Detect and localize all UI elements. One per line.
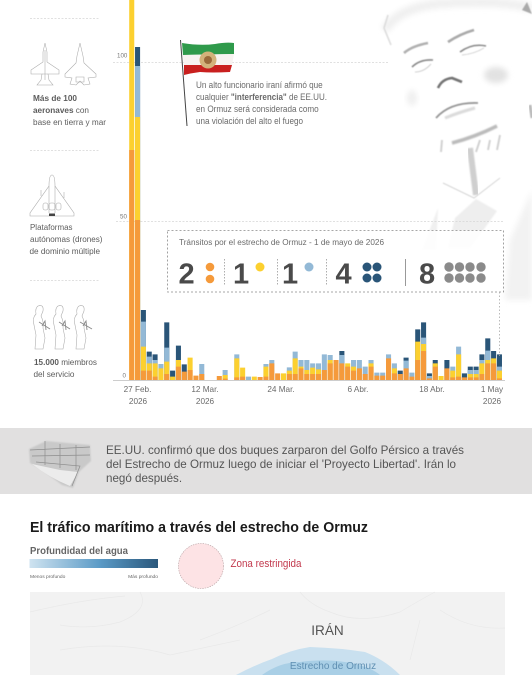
legend: water depth: Profundidad del agua [30, 546, 129, 557]
x axis labels: 24 Mar. [267, 385, 295, 394]
text: aircraft: base en tierra y mar [33, 117, 106, 127]
panel: transits on 1 May [168, 230, 504, 356]
text: aircraft: Más de 100 [33, 93, 77, 103]
x axis labels: 12 Mar. [191, 385, 219, 394]
count: oil 2: 2 [178, 258, 195, 290]
panel title: Tránsitos por el estrecho de Ormuz - 1 de mayo de 2026 [179, 237, 384, 247]
x axis labels: 6 Abr. [348, 385, 368, 394]
legend: restricted zone [178, 544, 302, 588]
legend: water depth: Más profundo [128, 574, 158, 580]
count: 1 yellow [233, 258, 264, 290]
legend: water depth [30, 546, 158, 580]
note text: EE.UU. confirmó que dos buques zarparon del Golfo Pérsico a través [106, 444, 464, 457]
x axis labels [124, 385, 504, 406]
y axis labels: 0 [122, 372, 126, 380]
icon: drone [30, 175, 74, 216]
icon: soldiers [33, 306, 92, 349]
count: total 8 [419, 258, 486, 290]
x axis labels: 2026 [129, 397, 148, 406]
x axis labels: 18 Abr. [419, 385, 445, 394]
count: 1 light blue: 1 [282, 258, 298, 290]
label: country: IRÁN [311, 623, 344, 638]
text: aircraft [33, 93, 106, 127]
legend: water depth: Menos profundo [30, 574, 66, 580]
portrait: sketch of Trump [384, 2, 532, 300]
text: aircraft: aeronaves con [33, 105, 89, 115]
text: service members [34, 357, 97, 379]
x axis labels: 2026 [196, 397, 215, 406]
y axis labels [117, 52, 128, 380]
note text [106, 444, 464, 485]
text: service members: 15.000 miembros [34, 357, 97, 367]
x axis labels: 2026 [483, 397, 502, 406]
text: Iranian official [196, 80, 327, 126]
panel: note band [0, 428, 532, 494]
text: drones: de dominio múltiple [30, 246, 100, 256]
count: 1 yellow: 1 [233, 258, 249, 290]
x axis labels: 1 May [481, 385, 504, 394]
text: Iranian official: una violación del alto el fuego [196, 116, 303, 126]
count: total 8: 8 [419, 258, 435, 290]
count: 4 dark blue [336, 258, 382, 290]
text: service members: del servicio [34, 369, 75, 379]
divider lines [30, 18, 504, 280]
stacked bars [129, 0, 502, 380]
text: Iranian official: Un alto funcionario iraní afirmó que [196, 80, 323, 90]
text: drones: Plataformas [30, 222, 72, 232]
text: Iranian official: en Ormuz será considerada como [196, 104, 319, 114]
y axis labels: 100 [117, 52, 128, 60]
count: 4 dark blue: 4 [336, 258, 352, 290]
heading: maritime traffic: El tráfico marítimo a través del estrecho de Ormuz [30, 520, 368, 536]
note text: negó después. [106, 472, 182, 485]
icon: Iranian flag [180, 40, 234, 126]
map: strait of Hormuz [30, 592, 505, 675]
count: 1 light blue [282, 258, 314, 290]
count: oil 2 [178, 258, 214, 290]
label: strait: Estrecho de Ormuz [290, 661, 376, 672]
text: drones: autónomas (drones) [30, 234, 103, 244]
shallow water [236, 647, 400, 675]
icon: container ship [29, 441, 91, 488]
y axis labels: 50 [120, 214, 127, 220]
bar chart: transits per day [113, 0, 505, 406]
x axis labels: 27 Feb. [124, 385, 151, 394]
icon: two aircraft [31, 43, 96, 85]
text: Iranian official: cualquier "interferencia" de EE.UU. [196, 92, 327, 102]
legend: restricted zone: Zona restringida [230, 558, 302, 570]
deeper water [262, 660, 380, 675]
note text: del Estrecho de Ormuz luego de iniciar el 'Proyecto Libertad'. Irán lo [106, 458, 456, 471]
text: drones [30, 222, 103, 256]
